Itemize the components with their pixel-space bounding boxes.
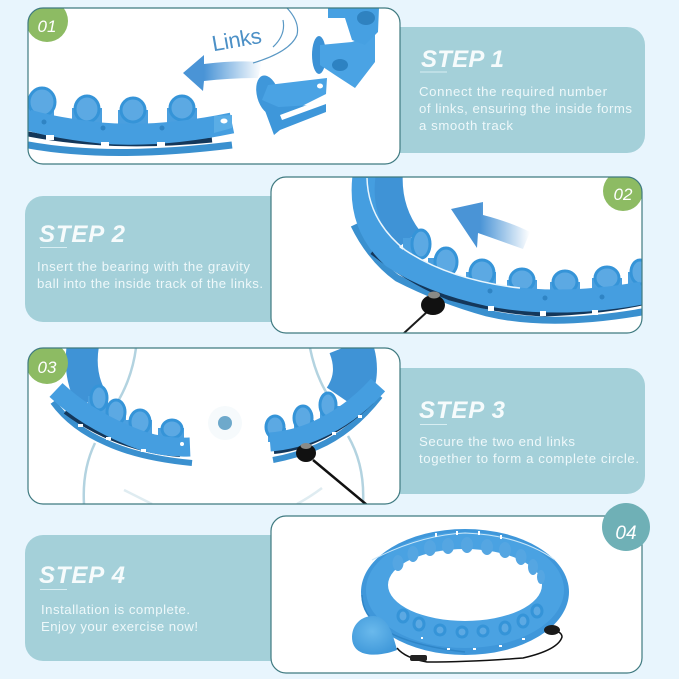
step 1 description: [419, 72, 632, 133]
assembled hoop: [361, 529, 569, 655]
cord with weight: [397, 625, 562, 662]
faint body outline: [84, 348, 363, 504]
gravity ball: [352, 616, 397, 655]
panel: step 2 text: [25, 196, 290, 322]
heading: step 1: STEP 1: [421, 46, 504, 73]
badge 01: [28, 8, 68, 42]
second link piece: [312, 33, 375, 88]
badge 03: 03: [38, 358, 57, 377]
center dot: [208, 406, 242, 440]
step 4 description: Installation is complete.: [41, 602, 190, 617]
badge 03: [28, 348, 68, 384]
step 3 description: together to form a complete circle.: [419, 451, 639, 466]
panel: step 1 image: [26, 0, 400, 164]
badge 02: [603, 178, 642, 211]
step 2 description: [37, 247, 263, 291]
step 4 description: Enjoy your exercise now!: [41, 619, 198, 634]
loose link piece: [252, 73, 327, 135]
step 1 description: of links, ensuring the inside forms: [419, 101, 632, 116]
badge 04: 04: [615, 523, 637, 544]
badge 01: 01: [38, 17, 56, 36]
badge 02: 02: [614, 185, 633, 204]
step 3 description: [419, 424, 639, 466]
heading: step 4: STEP 4: [39, 562, 125, 589]
heading: step 3: STEP 3: [419, 397, 506, 424]
curved line: [253, 8, 298, 63]
hoop with bearing: [354, 170, 650, 334]
step 4 description: [40, 589, 198, 634]
panel: step 1 text: [380, 27, 645, 153]
heading: step 2: STEP 2: [39, 221, 126, 248]
step 2 description: Insert the bearing with the gravity: [37, 259, 250, 274]
panel: step 3 text: [380, 368, 645, 494]
step 1 description: a smooth track: [419, 118, 513, 133]
panel: step 3 image: [26, 342, 400, 505]
panel: step 4 text: [25, 535, 290, 661]
panel: step 4 image: [271, 516, 642, 673]
step 1 description: Connect the required number: [419, 84, 608, 99]
step 3 description: Secure the two end links: [419, 434, 575, 449]
badge 04: [602, 503, 650, 551]
left hoop section: [53, 345, 192, 463]
label: links: Links: [210, 23, 263, 56]
hoop segment with links: [28, 88, 232, 152]
arrow: [183, 55, 262, 91]
arrow: [451, 202, 530, 249]
panel: step 2 image: [271, 170, 650, 334]
inner discs: [392, 537, 545, 584]
right hoop section: [266, 345, 380, 505]
step 2 description: ball into the inside track of the links.: [37, 276, 263, 291]
top link piece: [328, 8, 379, 41]
